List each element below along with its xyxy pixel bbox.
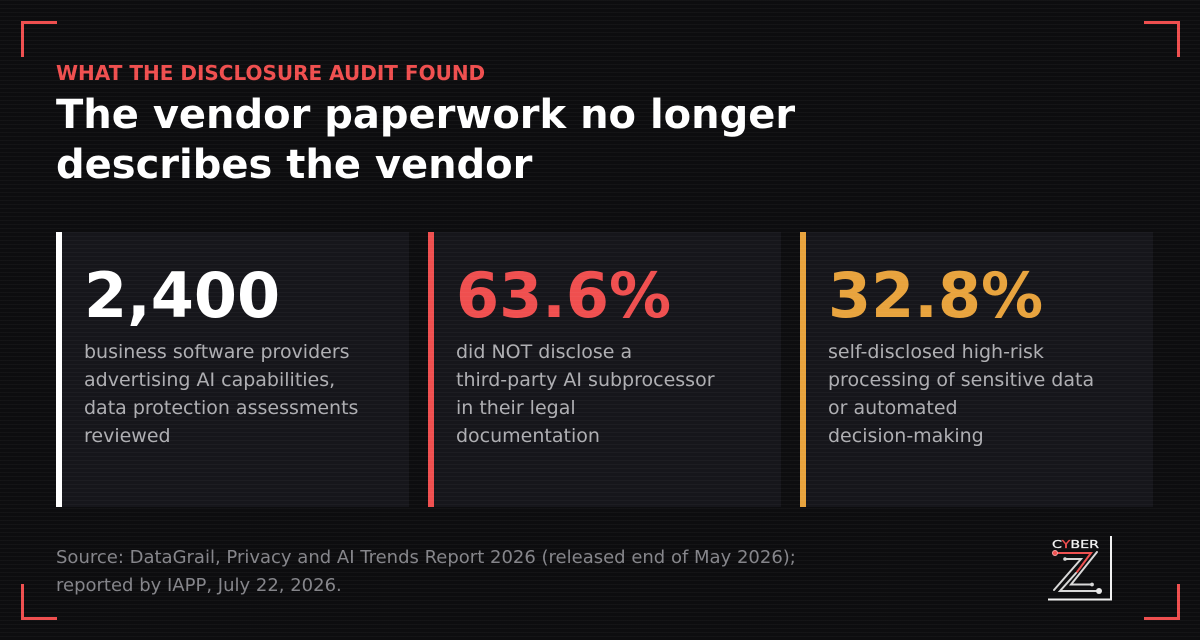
description: subprocessor: documentation [456,425,600,447]
title: describes the vendor [56,142,532,188]
source note: reported by IAPP, July 22, 2026. [56,575,342,596]
corner bracket: top right [1144,21,1180,57]
panel: providers reviewed [56,232,409,507]
description: providers: business software providers [84,341,350,363]
description: providers: reviewed [84,425,171,447]
description: providers [84,341,358,447]
description: subprocessor: third-party AI subprocessor [456,369,715,391]
description: subprocessor: in their legal [456,397,576,419]
stat: 2,400: 2,400 [84,259,280,332]
stat: 32.8%: 32.8% [828,259,1043,332]
accent bar: amber [800,232,806,507]
description: subprocessor [456,341,715,447]
logo: Cyber Z [1048,536,1112,600]
stat: 63.6%: 63.6% [456,259,671,332]
description: high-risk [828,341,1094,447]
corner bracket: bottom left [21,584,57,620]
description: providers: advertising AI capabilities, [84,369,335,391]
corner bracket: top left [21,21,57,57]
panel: undisclosed subprocessor [428,232,781,507]
title: The vendor paperwork no longer [56,92,795,138]
logo: Cyber Z: CYBER [1052,538,1099,551]
eyebrow heading: WHAT THE DISCLOSURE AUDIT FOUND [56,61,485,85]
title [56,92,795,188]
accent bar: white [56,232,62,507]
corner bracket: bottom right [1144,584,1180,620]
panel: high-risk processing [800,232,1153,507]
description: high-risk: decision-making [828,425,984,447]
description: high-risk: or automated [828,397,958,419]
description: subprocessor: did NOT disclose a [456,341,632,363]
description: providers: data protection assessments [84,397,358,419]
description: high-risk: self-disclosed high-risk [828,341,1044,363]
description: high-risk: processing of sensitive data [828,369,1094,391]
accent bar: red [428,232,434,507]
source note: Source: DataGrail, Privacy and AI Trends Report 2026 (released end of May 2026); [56,547,796,568]
source note [56,547,796,596]
